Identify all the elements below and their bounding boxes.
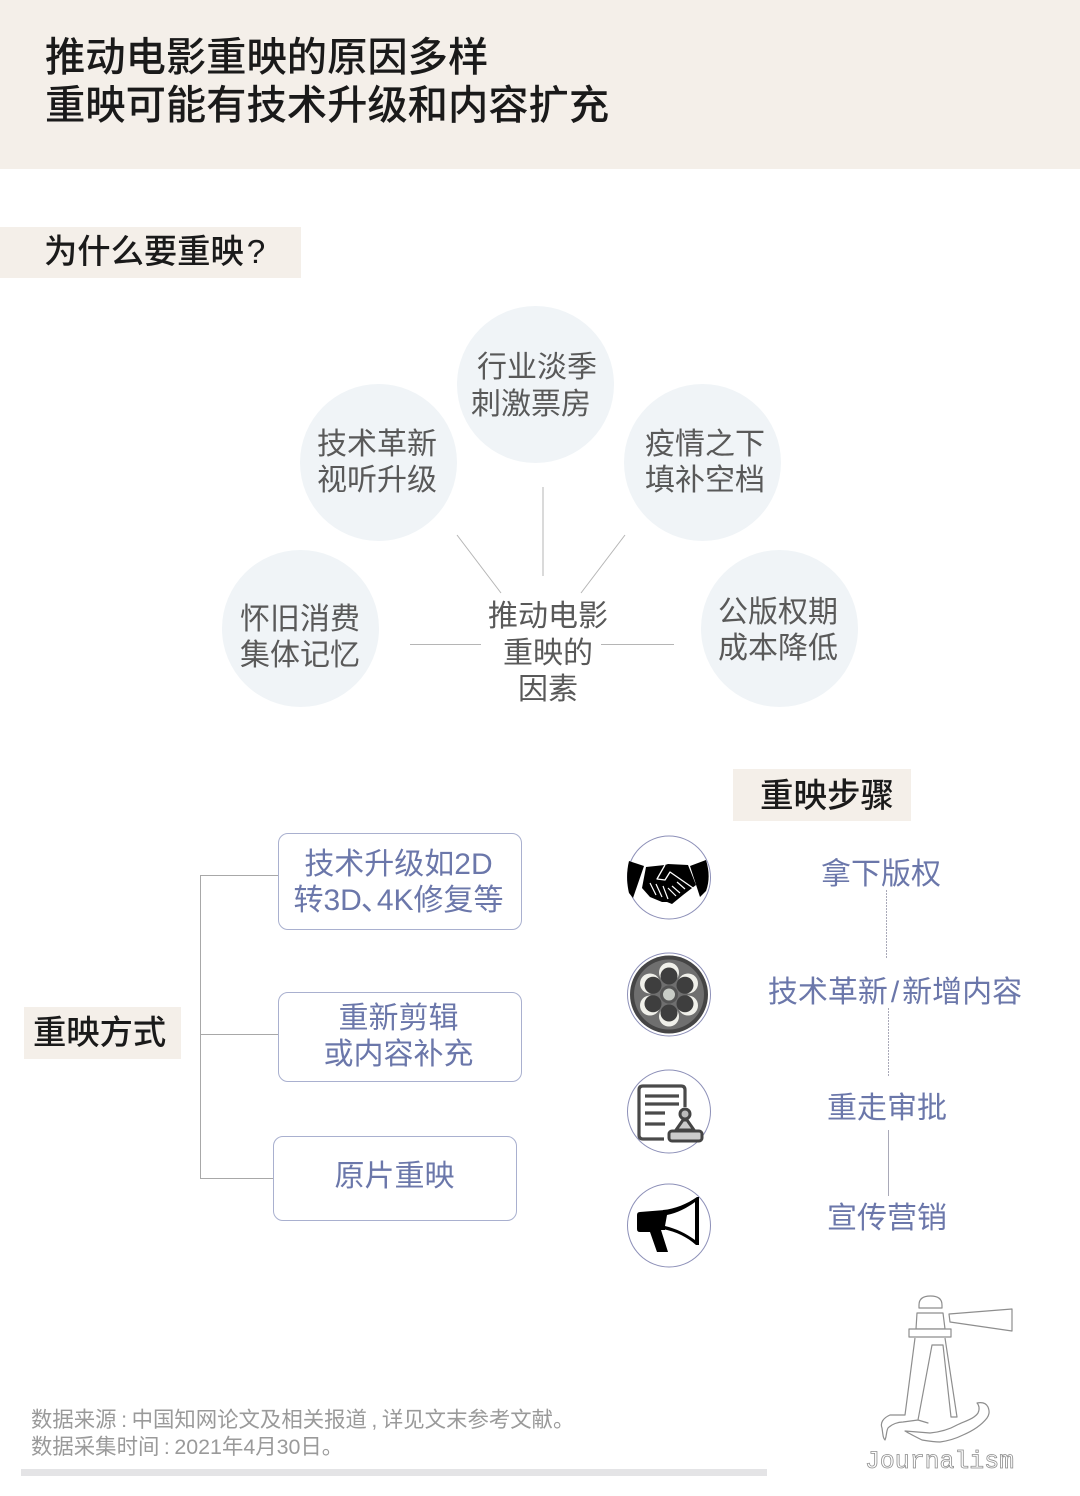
circle: technology (300, 384, 457, 541)
center label: 重映的 (503, 636, 593, 670)
step: tech upgrade: 技术革新/新增内容 (768, 976, 1022, 1008)
center label: 推动电影 (488, 600, 608, 633)
center label (488, 600, 608, 706)
method box: technology: 、 (361, 884, 391, 917)
method box: re-edit: 或内容补充 (324, 1038, 474, 1071)
heading: steps (733, 769, 911, 821)
title: 推动电影重映的原因多样 (45, 34, 488, 80)
icon: megaphone (627, 1184, 711, 1268)
circle: nostalgia (222, 550, 379, 707)
heading: methods (24, 1007, 181, 1059)
title (45, 34, 609, 128)
step: acquire rights: 拿下版权 (821, 858, 941, 890)
title: 重映可能有技术升级和内容扩充 (45, 82, 609, 128)
circle: technology: 视听升级 (317, 464, 437, 497)
heading: methods: 重映方式 (33, 1015, 166, 1052)
method box: re-edit: 重新剪辑 (338, 1002, 458, 1034)
step: approval: 重走审批 (827, 1092, 947, 1124)
source note: : (164, 1434, 170, 1458)
source note (31, 1408, 574, 1458)
method box: original: 原片重映 (334, 1160, 454, 1193)
heading: why re-release (0, 227, 301, 278)
method box: original (273, 1136, 517, 1221)
source note: 数据来源 中国知网论文及相关报道 详见文末参考文献。 (31, 1408, 574, 1432)
circle: nostalgia: 集体记忆 (240, 639, 360, 672)
circle: pandemic (624, 384, 781, 541)
source note: : (121, 1408, 127, 1432)
source note: 数据采集时间 2021年4月30日。 (31, 1434, 343, 1458)
circle: off season (457, 306, 614, 463)
circle: technology: 技术革新 (317, 428, 437, 461)
method box: re-edit (278, 992, 522, 1082)
circle: off season: 行业淡季 (477, 351, 597, 384)
logo text: Journalism (865, 1447, 1014, 1476)
heading: steps: 重映步骤 (760, 778, 894, 815)
circle: public domain: 成本降低 (718, 632, 838, 665)
method box: technology (278, 833, 522, 930)
connector lines (410, 487, 674, 645)
circle diagram: factors (222, 306, 858, 707)
icon: handshake (627, 836, 711, 920)
circle: public domain (701, 550, 858, 707)
footer bar (21, 1469, 767, 1476)
center label: 因素 (518, 673, 578, 706)
method box: technology: 技术升级如2D (304, 848, 493, 880)
circle: off season: 刺激票房 (471, 388, 591, 421)
step: marketing: 宣传营销 (827, 1202, 947, 1234)
title band (0, 0, 1080, 169)
logo: lighthouse (865, 1295, 1014, 1476)
source note: , (371, 1408, 377, 1432)
method box: technology: 转3D 4K修复等 (293, 884, 504, 917)
icon: film reel (627, 952, 711, 1036)
icon: document stamp (627, 1070, 711, 1154)
circle: nostalgia: 怀旧消费 (240, 603, 360, 636)
heading: why re-release: 为什么要重映? (44, 234, 265, 271)
circle: pandemic: 疫情之下 (645, 428, 765, 461)
circle: pandemic: 填补空档 (645, 464, 765, 497)
circle: public domain: 公版权期 (718, 596, 838, 629)
